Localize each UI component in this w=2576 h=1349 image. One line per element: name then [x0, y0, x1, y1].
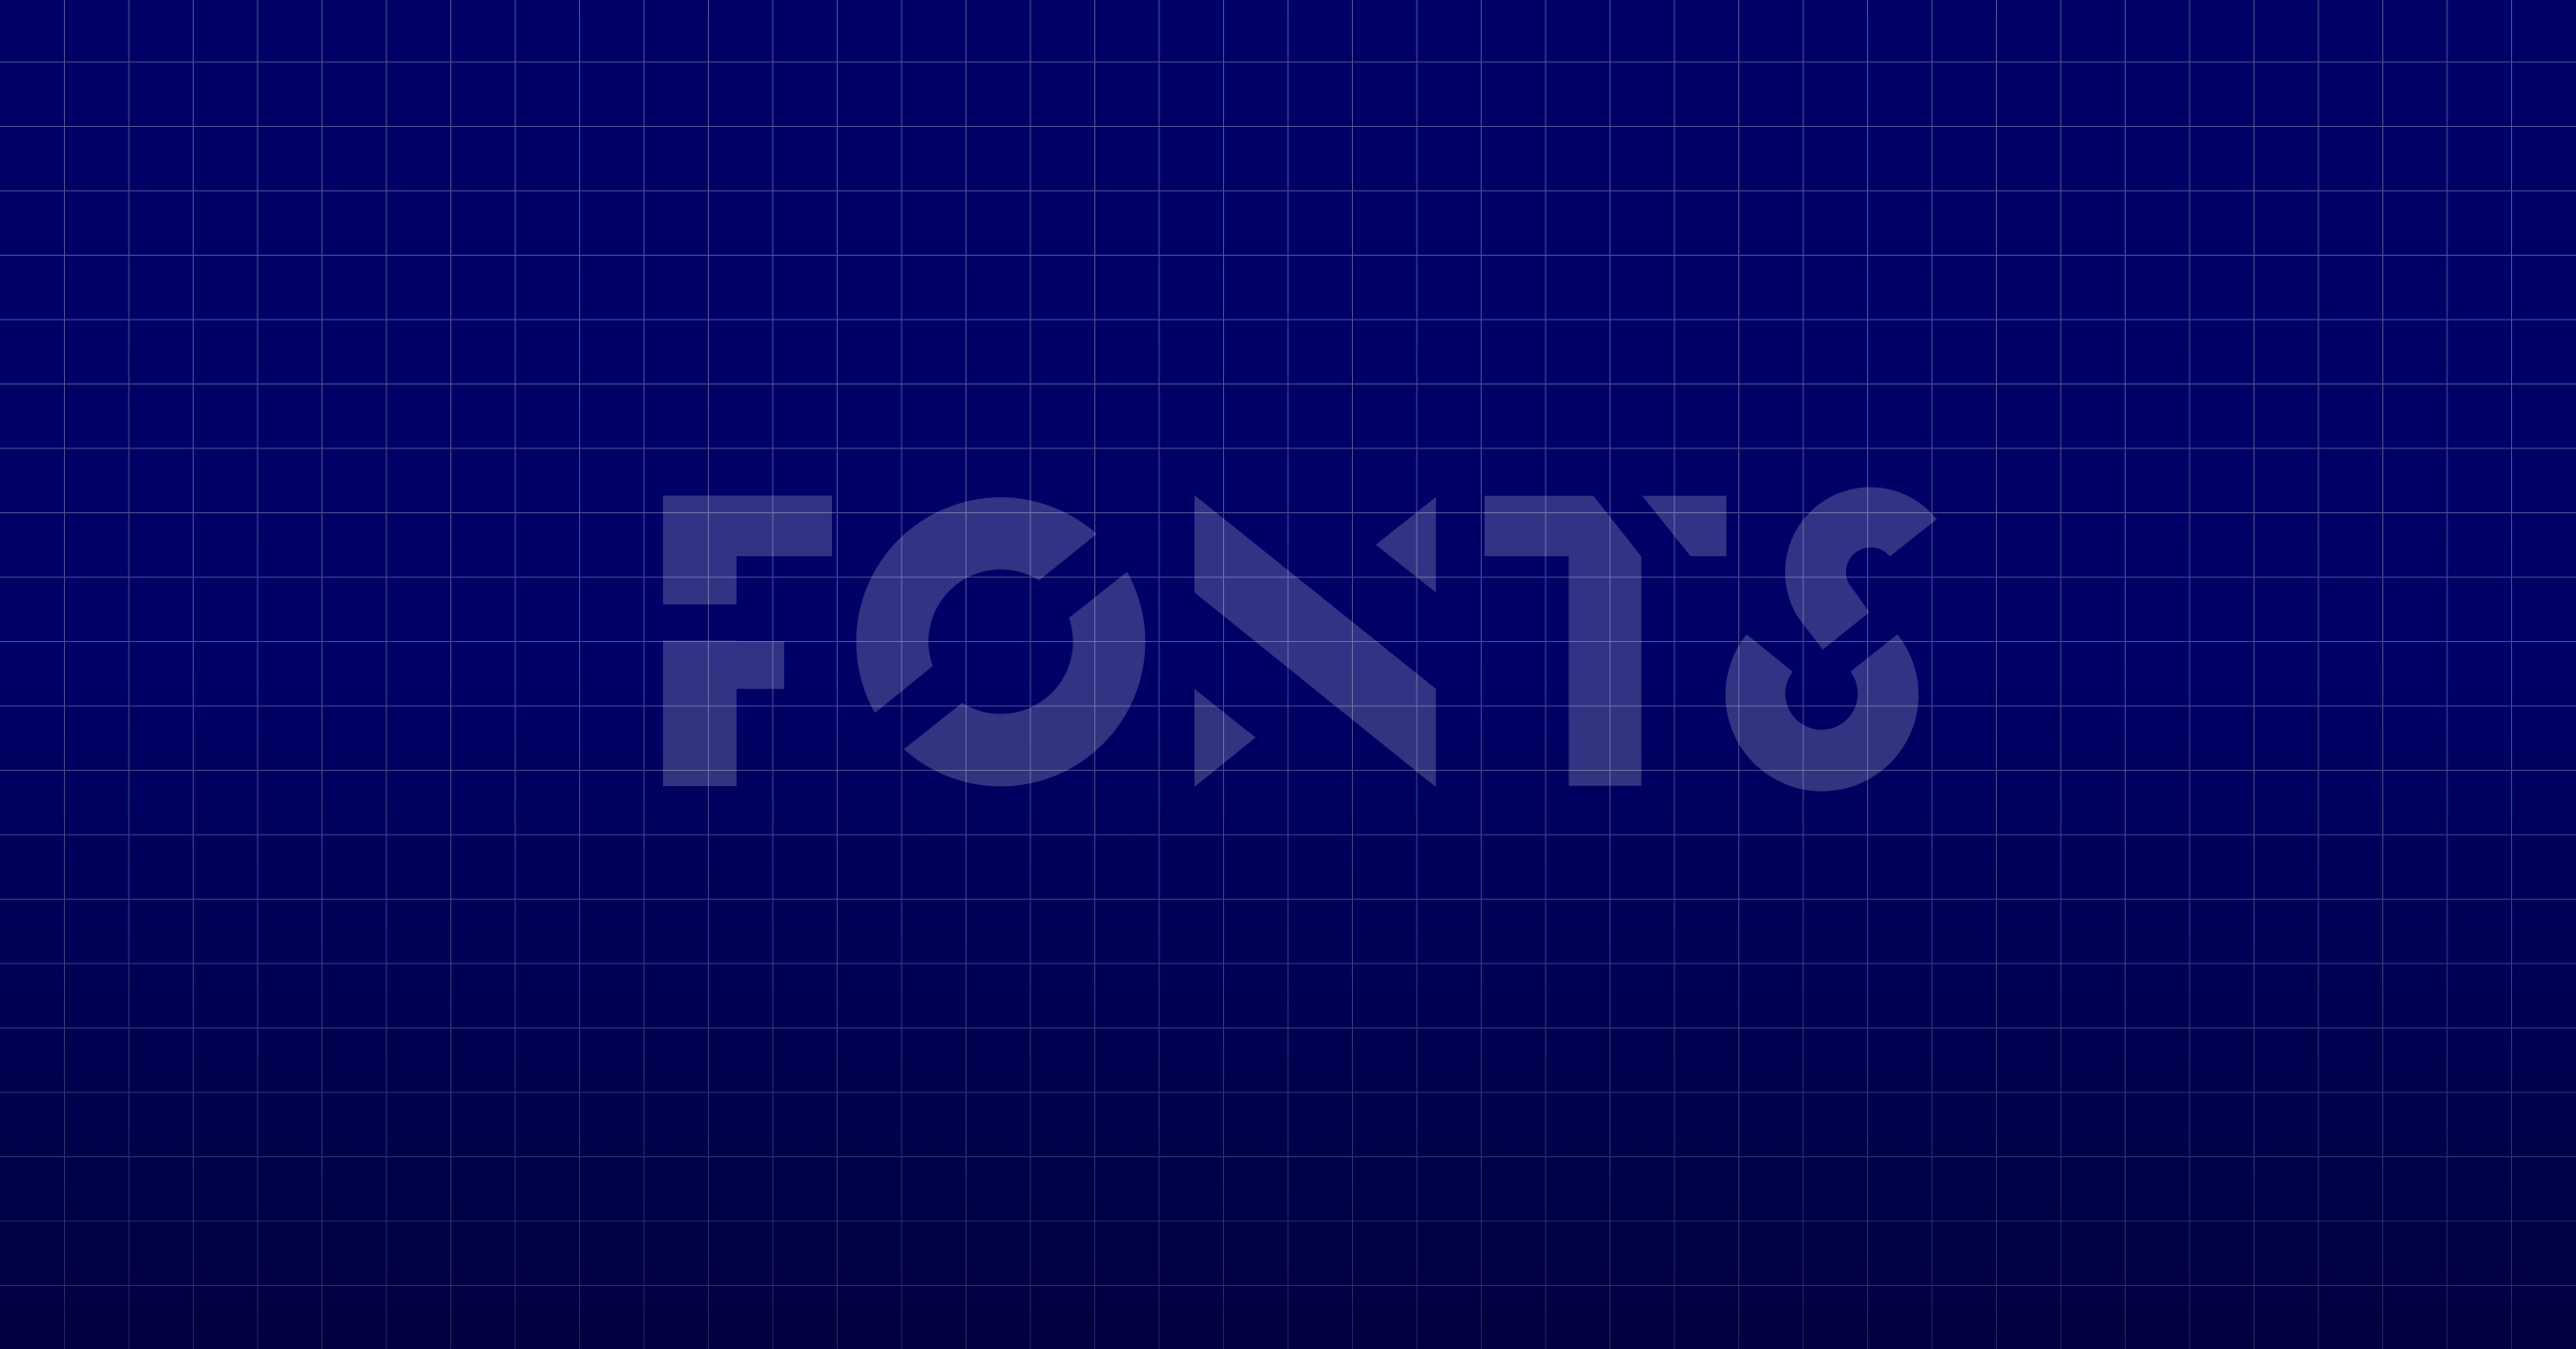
letter T: T: [1486, 423, 1724, 873]
letter S: S: [1707, 422, 1953, 873]
letter F: F: [639, 425, 850, 873]
letter O: O: [842, 431, 1159, 864]
wordmark: FONTS: [663, 487, 1937, 792]
letter N: N: [1167, 424, 1463, 873]
